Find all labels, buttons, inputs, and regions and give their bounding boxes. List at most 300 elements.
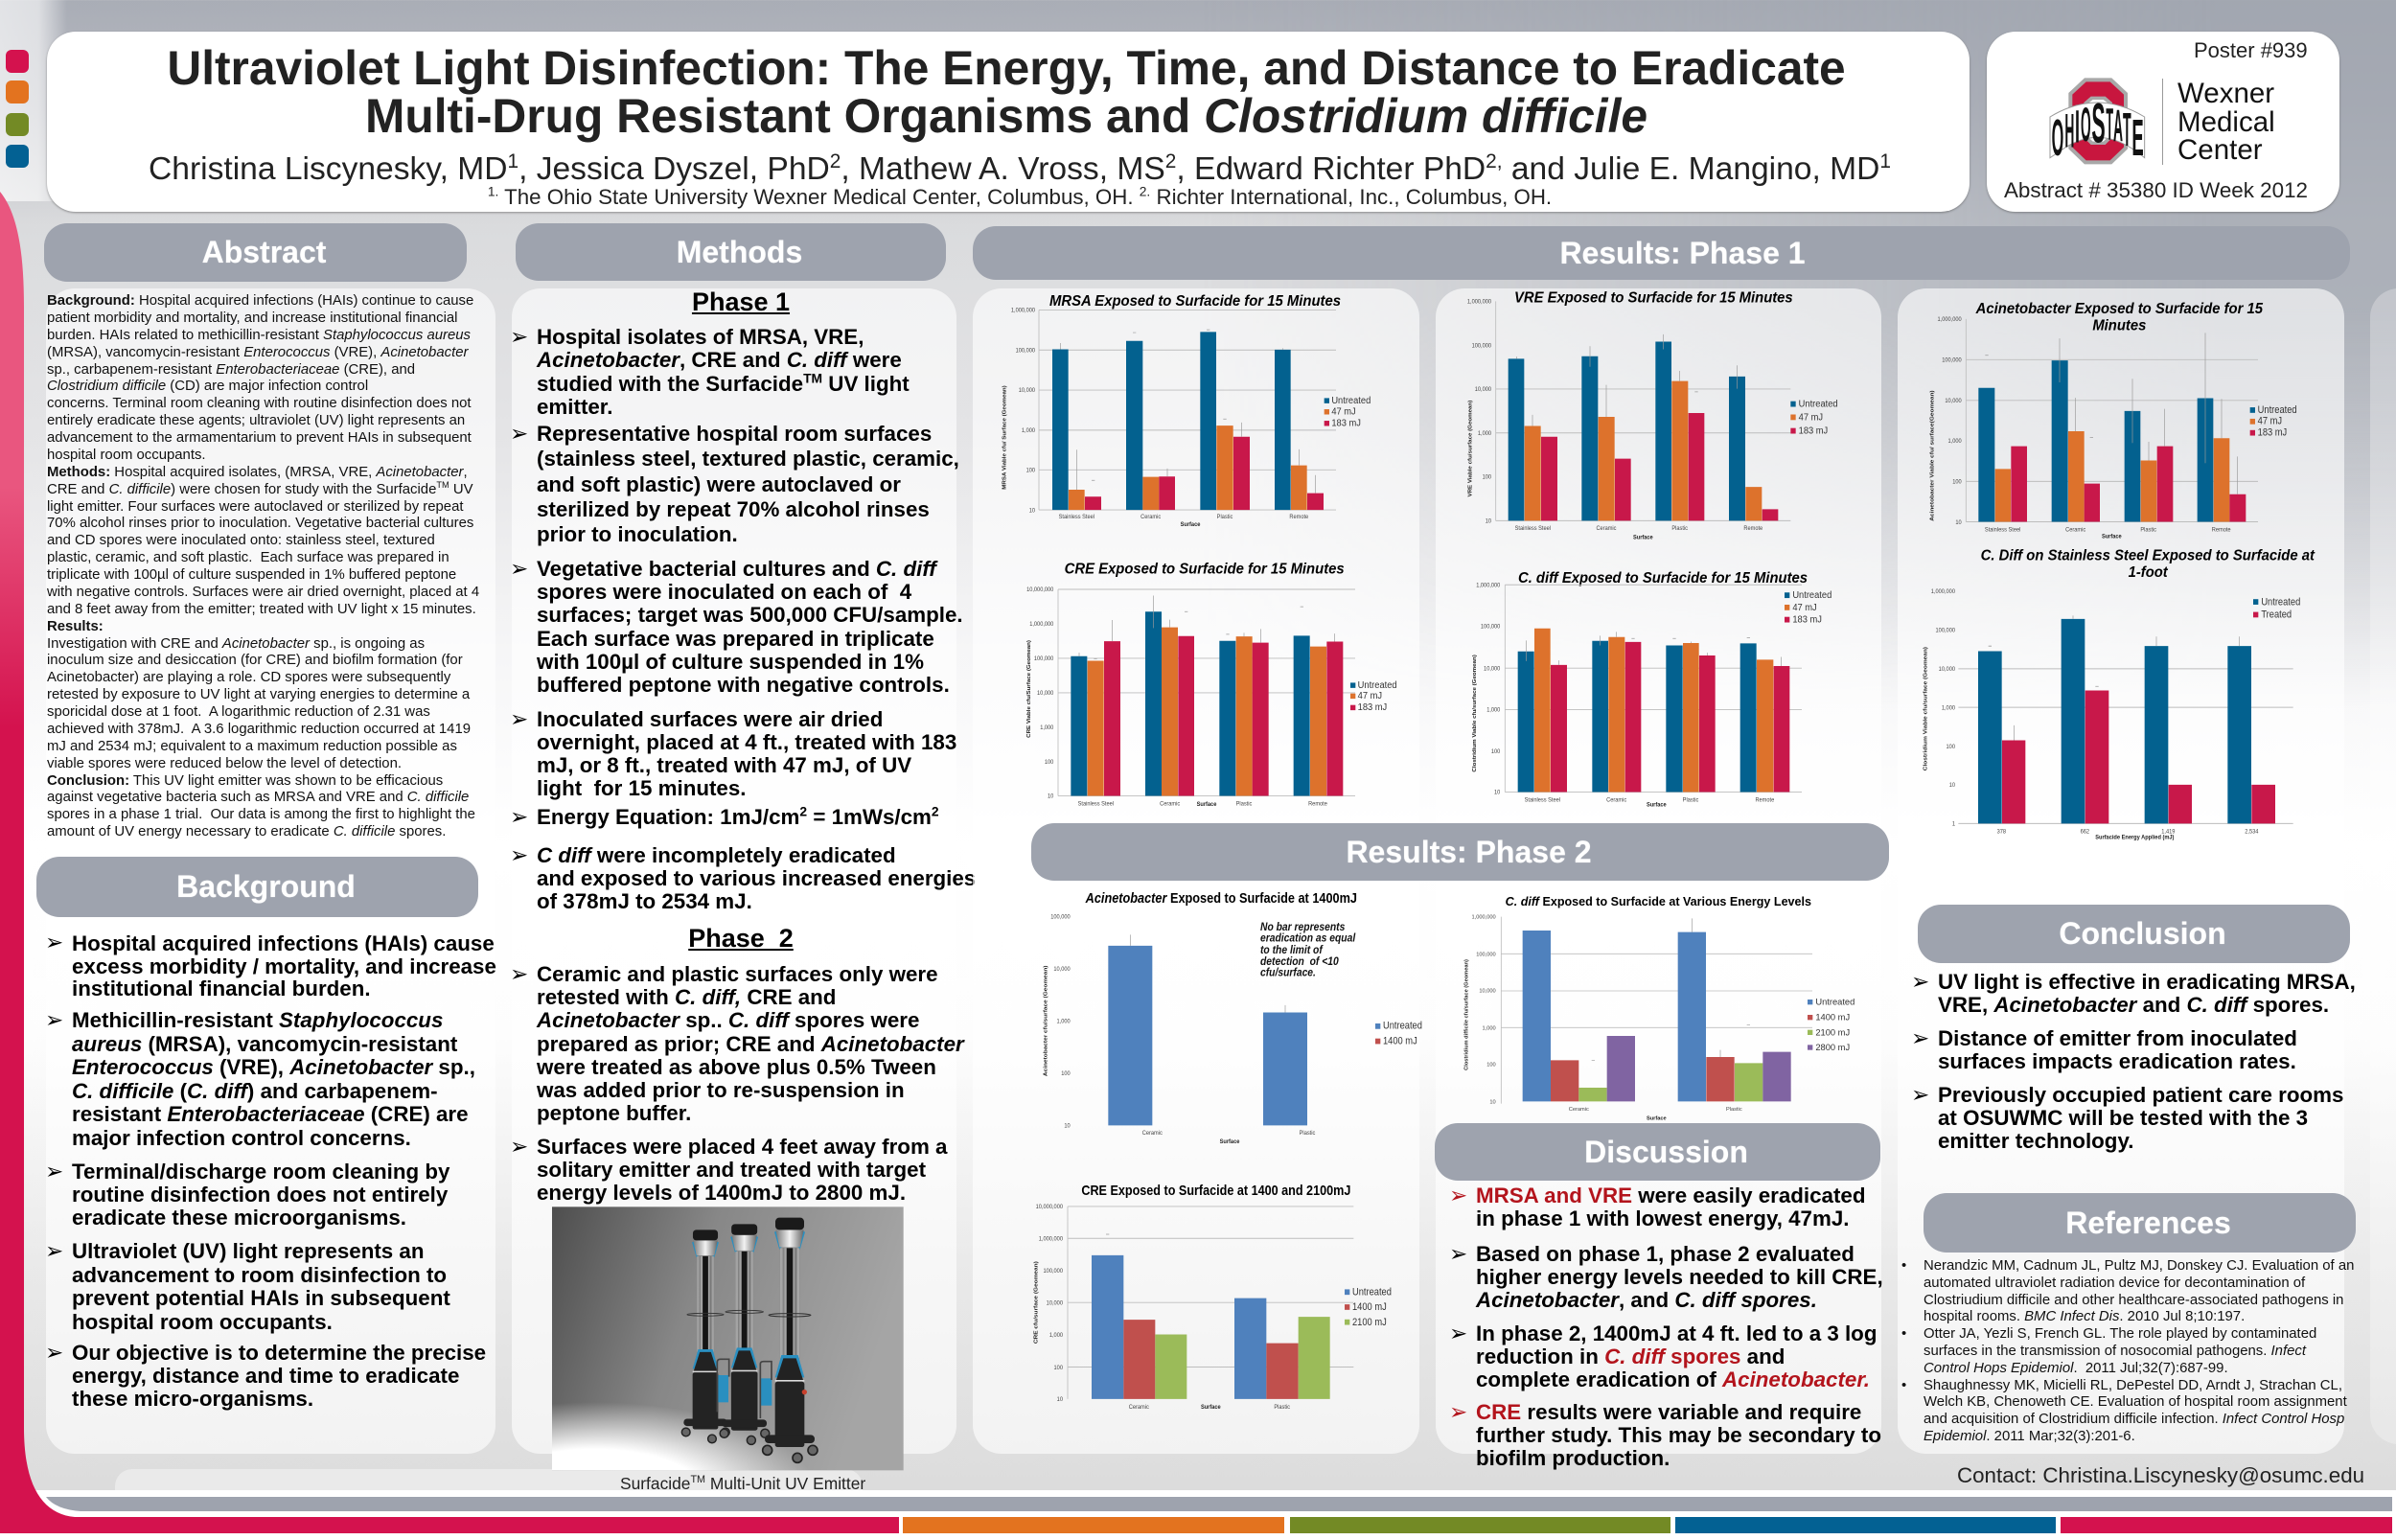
- title panel: [47, 32, 1970, 212]
- chart: C. Diff on stainless steel: 1,000,000: [1931, 588, 1956, 595]
- chart: C. diff: 100,000: [1481, 625, 1501, 631]
- chart: C. diff various energy levels: 1400 mJ: [1815, 1013, 1850, 1023]
- chart: CRE 1400 and 2100mJ: 100,000: [1044, 1268, 1064, 1275]
- chart: CRE 1400 and 2100mJ: 100: [1054, 1364, 1064, 1371]
- chart: CRE 1400 and 2100mJ: Untreated: [1352, 1287, 1392, 1299]
- chart: CRE: 1,000: [1040, 725, 1054, 731]
- background bullet 3: [45, 1160, 450, 1230]
- chart: C. Diff on stainless steel: [1923, 547, 2315, 841]
- methods bullet 4: overnight, placed at 4 ft., treated with 183: [537, 730, 956, 754]
- references text: Welch KB, Chenoweth CE. Evaluation of hospital room assignment: [1924, 1394, 2347, 1410]
- panel: results 1: [973, 288, 1419, 1454]
- background bullet 5: energy, distance and time to eradicate: [72, 1364, 459, 1388]
- methods bullet 6: [510, 843, 976, 913]
- chart: C. diff: Plastic: [1683, 798, 1698, 804]
- discussion bullet 3: complete eradication of Acinetobacter.: [1476, 1368, 1870, 1391]
- chart: Acinetobacter: Surface: [2102, 533, 2122, 540]
- abstract text: Background: Hospital acquired infections (HAIs) continue to cause: [47, 293, 473, 309]
- chart: CRE: 100: [1045, 760, 1054, 766]
- heading: Results Phase 1: [973, 226, 2350, 280]
- methods bullet 1: studied with the SurfacideTM UV light: [537, 370, 910, 396]
- methods bullet 3: surfaces; target was 500,000 CFU/sample.: [537, 603, 963, 627]
- methods bullet 4: mJ, or 8 ft., treated with 47 mJ, of UV: [537, 753, 911, 777]
- chart: C. diff various energy levels: Clostridium difficile cfu/surface (Geomean): [1464, 959, 1470, 1070]
- discussion text: ➢: [1449, 1184, 1467, 1208]
- references text: hospital rooms. BMC Infect Dis. 2010 Jul 8;10:197.: [1924, 1309, 2245, 1324]
- methods bullet 7: [510, 962, 965, 1125]
- chart: C. diff: 1,000: [1486, 707, 1501, 714]
- abstract text: Investigation with CRE and Acinetobacter sp., is ongoing as: [47, 636, 425, 652]
- conclusion bullet 1: UV light is effective in eradicating MRSA,: [1938, 970, 2356, 994]
- conclusion text: ➢: [1911, 1026, 1929, 1051]
- chart: CRE: 10,000,000: [1026, 587, 1054, 593]
- panel: bottom stub: [115, 1469, 863, 1490]
- abstract text: Clostridium difficile (CD) are major infection control: [47, 379, 368, 394]
- abstract text: CRE and C. difficile) were chosen for study with the SurfacideTM UV: [47, 480, 473, 497]
- background bullet 2: Methicillin-resistant Staphylococcus: [72, 1008, 443, 1032]
- chart: C. diff: 47 mJ: [1792, 602, 1817, 613]
- heading: Discussion: Discussion: [1584, 1135, 1748, 1169]
- background bullet 1: excess morbidity / mortality, and increase: [72, 954, 496, 978]
- discussion bullet 2: [1449, 1242, 1883, 1312]
- chart: Acinetobacter: Untreated: [2258, 404, 2297, 416]
- chart: C. diff: 10: [1494, 791, 1501, 796]
- abstract text: Methods: Hospital acquired isolates, (MRSA, VRE, Acinetobacter,: [47, 465, 468, 480]
- panel: methods: ➢: [510, 707, 528, 732]
- chart: CRE 1400 and 2100mJ: 1,000: [1049, 1332, 1064, 1339]
- chart: Acinetobacter: 1,000,000: [1937, 316, 1962, 323]
- chart: VRE: 47 mJ: [1799, 412, 1823, 423]
- abstract text: and CD spores were inoculated onto: stainless steel, textured: [47, 533, 435, 548]
- chart: Acinetobacter 1400mJ: Ceramic: [1142, 1130, 1163, 1137]
- chart: C. diff: Untreated: [1792, 590, 1832, 601]
- methods bullet 7: Ceramic and plastic surfaces only were: [537, 962, 938, 986]
- panel: results 2: [1436, 288, 1881, 1454]
- conclusion bullet 3: Previously occupied patient care rooms: [1938, 1083, 2343, 1107]
- chart: Acinetobacter 1400mJ: Plastic: [1300, 1130, 1315, 1137]
- charts column 3: Acinetobacter and C. Diff on stainless steel: [1923, 300, 2315, 841]
- logo: Ohio State block O: O: [2052, 110, 2063, 168]
- background shading right: [1364, 0, 2396, 667]
- logo: Ohio State block O: A: [2113, 102, 2123, 151]
- note: to the limit of: [1260, 944, 1324, 956]
- references text: •: [1901, 1378, 1906, 1393]
- affiliations: 1. The Ohio State University Wexner Medical Center, Columbus, OH. 2. Richter International, Inc., Columbus, OH.: [488, 184, 1552, 209]
- chart: CRE 1400 and 2100mJ: Ceramic: [1129, 1404, 1149, 1411]
- methods bullet 6: of 378mJ to 2534 mJ.: [537, 889, 752, 913]
- chart: CRE 1400 and 2100mJ: 10,000,000: [1036, 1204, 1064, 1210]
- chart: Acinetobacter 1400mJ: 1,000: [1057, 1018, 1071, 1025]
- chart: C. diff: Remote: [1755, 798, 1775, 804]
- heading: References: [1924, 1193, 2356, 1253]
- chart: C. Diff on stainless steel: Clostridium Viable cfu/surface (Geomean): [1923, 647, 1928, 770]
- methods bullet 7: were treated as above plus 0.5% Tween: [537, 1055, 936, 1079]
- conclusion bullet 1: [1911, 970, 2356, 1017]
- wordmark: Wexner: [2177, 78, 2274, 109]
- panel: methods: ➢: [510, 843, 528, 868]
- methods bullet 3: buffered peptone with negative controls.: [537, 673, 950, 697]
- abstract text: with negative controls. Surfaces were air dried overnight, placed at 4: [47, 585, 479, 600]
- note: cfu/surface.: [1260, 967, 1316, 979]
- chart: Acinetobacter 1400mJ: Untreated: [1383, 1021, 1422, 1032]
- chart: Acinetobacter 1400mJ: [1043, 890, 1422, 1145]
- references text: Control Hops Epidemiol. 2011 Jul;32(7):687-99.: [1924, 1361, 2228, 1376]
- conclusion text: [1911, 970, 2356, 1153]
- conclusion bullet 1: VRE, Acinetobacter and C. diff spores.: [1938, 993, 2329, 1017]
- chart: MRSA: MRSA Exposed to Surfacide for 15 Minutes: [1049, 294, 1341, 310]
- chart: CRE 1400 and 2100mJ: 10,000: [1047, 1299, 1064, 1307]
- background bullet 5: these micro-organisms.: [72, 1387, 313, 1411]
- chart: CRE: Ceramic: [1160, 802, 1180, 808]
- abstract text: patient morbidity and mortality, and increase institutional financial: [47, 310, 457, 326]
- chart: CRE: Surface: [1197, 802, 1217, 808]
- chart: VRE: 1,000: [1478, 431, 1492, 437]
- chart: C. Diff on stainless steel: 1-foot: [2129, 563, 2169, 581]
- abstract text: mJ and 2534 mJ; equivalent to a maximum reduction possible as: [47, 739, 457, 754]
- chart: Acinetobacter: Acinetobacter Exposed to Surfacide for 15: [1975, 300, 2264, 317]
- chart: C. Diff on stainless steel: 1: [1952, 820, 1956, 828]
- methods bullet 7: retested with C. diff, CRE and: [537, 985, 836, 1009]
- panel: abstract and background: ➢: [45, 931, 63, 955]
- chart: VRE: 10: [1486, 518, 1492, 525]
- panel: methods: ➢: [510, 325, 528, 350]
- abstract text: retested by exposure to UV light at varying energies to determine a: [47, 687, 470, 702]
- discussion bullet 3: reduction in C. diff spores and: [1476, 1345, 1785, 1368]
- chart: C. diff: Surface: [1647, 802, 1667, 809]
- chart: MRSA: MRSA Viable cfu/ Surface (Geomean): [1002, 385, 1007, 490]
- heading: Results Phase 1: Results: Phase 1: [1559, 236, 1806, 270]
- logo: Ohio State block O: S: [2091, 92, 2106, 154]
- chart: CRE 1400 and 2100mJ: 1,000,000: [1039, 1235, 1064, 1243]
- abstract text: light emitter. Four surfaces were autoclaved or sterilized by repeat: [47, 498, 464, 514]
- chart: MRSA: 1,000,000: [1011, 308, 1036, 314]
- background bullet 2: Enterococcus (VRE), Acinetobacter sp.,: [72, 1055, 475, 1079]
- chart: MRSA: Remote: [1289, 515, 1309, 520]
- background bullet 3: eradicate these microorganisms.: [72, 1206, 406, 1230]
- note: No bar represents: [1260, 921, 1345, 933]
- methods bullet 4: Inoculated surfaces were air dried: [537, 707, 883, 731]
- chart: VRE: Stainless Steel: [1515, 526, 1551, 532]
- charts phase 2 left: Acinetobacter and CRE: [1033, 890, 1422, 1411]
- conclusion bullet 3: [1911, 1083, 2343, 1153]
- chart: VRE: 100,000: [1472, 343, 1492, 349]
- chart: CRE: CRE Exposed to Surfacide for 15 Minutes: [1065, 562, 1345, 577]
- chart: C. diff various energy levels: C. diff Exposed to Surfacide at Various Energy Levels: [1506, 895, 1811, 908]
- discussion bullet 2: higher energy levels needed to kill CRE,: [1476, 1265, 1883, 1289]
- methods bullet 4: [510, 707, 956, 800]
- abstract text: plastic, ceramic, and soft plastic. Each surface was prepared in: [47, 550, 449, 565]
- discussion bullet 1: in phase 1 with lowest energy, 47mJ.: [1476, 1207, 1850, 1230]
- chart: CRE 1400 and 2100mJ: 10: [1057, 1396, 1064, 1403]
- abstract text: against vegetative bacteria such as MRSA and VRE and C. difficile: [47, 790, 469, 805]
- chart: VRE: 183 mJ: [1799, 425, 1828, 437]
- caption: SurfacideTM Multi-Unit UV Emitter: [620, 1474, 865, 1493]
- chart: VRE: [1467, 290, 1838, 541]
- chart: C. Diff on stainless steel: Treated: [2261, 609, 2292, 621]
- panel: methods: ➢: [510, 557, 528, 582]
- heading: Abstract: [44, 223, 467, 282]
- chart: C. Diff on stainless steel: 10,000: [1939, 666, 1956, 673]
- chart: C. diff: Clostridium Viable cfu/surface (Geomean): [1472, 655, 1478, 772]
- chart: CRE 1400 and 2100mJ: CRE cfu/surface (Geomean): [1033, 1261, 1039, 1344]
- methods bullet 3: with 100µl of culture suspended in 1%: [537, 650, 924, 674]
- chart: C. diff various energy levels: Untreated: [1815, 998, 1855, 1007]
- background bullet 2: C. difficile (C. diff) and carbapenem-: [72, 1079, 438, 1102]
- panel: methods: ➢: [510, 422, 528, 447]
- chart: C. diff: 183 mJ: [1792, 614, 1822, 626]
- discussion text: ➢: [1449, 1322, 1467, 1346]
- chart: VRE: 100: [1483, 475, 1492, 481]
- heading: Abstract: Abstract: [202, 235, 326, 269]
- logo: Ohio State block O: O: [2081, 97, 2091, 151]
- chart: VRE: Untreated: [1799, 399, 1838, 410]
- discussion bullet 4: CRE results were variable and require: [1476, 1400, 1861, 1424]
- chart: CRE 1400 and 2100mJ: [1033, 1183, 1392, 1411]
- methods bullet 3: Vegetative bacterial cultures and C. diff: [537, 557, 936, 581]
- chart: C. Diff on stainless steel: Surfacide Energy Applied (mJ): [2095, 834, 2174, 841]
- abstract text: and 8 feet away from the emitter; treated with UV light x 15 minutes.: [47, 602, 476, 617]
- heading: Background: Background: [176, 869, 356, 904]
- chart: MRSA: 10,000: [1019, 388, 1036, 394]
- heading: Conclusion: [1918, 905, 2350, 963]
- chart: C. diff various energy levels: 1,000: [1483, 1025, 1496, 1031]
- chart: Acinetobacter 1400mJ: Acinetobacter cfu/surface (Geomean): [1043, 966, 1048, 1076]
- chart: C. diff: Stainless Steel: [1525, 798, 1560, 804]
- background bullet 5: Our objective is to determine the precise: [72, 1341, 486, 1365]
- chart: CRE: Untreated: [1358, 680, 1397, 691]
- background bullet 5: [45, 1341, 486, 1411]
- background bullet 3: routine disinfection does not entirely: [72, 1183, 448, 1207]
- discussion bullet 4: biofilm production.: [1476, 1446, 1670, 1470]
- chart: CRE 1400 and 2100mJ: Plastic: [1274, 1404, 1290, 1411]
- chart: Acinetobacter 1400mJ: Acinetobacter Exposed to Surfacide at 1400mJ: [1085, 890, 1357, 906]
- logo: Ohio State block O: [2049, 78, 2145, 168]
- panel: abstract and background: ➢: [45, 1239, 63, 1264]
- chart: MRSA: 1,000: [1022, 428, 1036, 434]
- conclusion text: ➢: [1911, 970, 1929, 995]
- references text: surfaces in the transmission of nosocomial pathogens. Infect: [1924, 1344, 2306, 1359]
- chart: Acinetobacter: Ceramic: [2065, 526, 2085, 534]
- chart: CRE: Stainless Steel: [1078, 802, 1114, 808]
- heading: phase 1: Phase 1: [692, 287, 790, 316]
- panel: abstract and background: ➢: [45, 1341, 63, 1366]
- heading: Discussion: [1435, 1123, 1880, 1181]
- methods bullet 7: peptone buffer.: [537, 1101, 691, 1125]
- chart: CRE: Remote: [1308, 802, 1328, 808]
- chart: CRE: 10,000: [1037, 691, 1054, 697]
- abstract text: entirely eradicate these agents; ultraviolet (UV) light represents an: [47, 413, 465, 428]
- chart: Acinetobacter: 10,000: [1945, 398, 1962, 404]
- chart: CRE: 10: [1048, 794, 1054, 800]
- conclusion bullet 3: emitter technology.: [1938, 1129, 2133, 1153]
- chart: C. diff various energy levels: 10,000: [1479, 989, 1496, 995]
- abstract text: Results:: [47, 619, 104, 634]
- discussion bullet 2: Based on phase 1, phase 2 evaluated: [1476, 1242, 1855, 1266]
- heading: Methods: [516, 223, 946, 281]
- wordmark: [2177, 78, 2275, 166]
- chart: Acinetobacter: 1,000: [1948, 438, 1962, 445]
- chart: C. diff: [1472, 571, 1832, 809]
- discussion bullet 1: [1449, 1184, 1865, 1230]
- title: [167, 41, 1846, 143]
- chart: Acinetobacter: 10: [1955, 518, 1962, 526]
- methods bullet 2: Representative hospital room surfaces: [537, 422, 932, 446]
- methods bullet 3: [510, 557, 963, 697]
- chart: CRE: 47 mJ: [1358, 691, 1382, 701]
- chart: Acinetobacter: 183 mJ: [2258, 427, 2287, 439]
- chart: CRE: 100,000: [1034, 656, 1054, 662]
- references text: Nerandzic MM, Cadnum JL, Pultz MJ, Donskey CJ. Evaluation of an: [1924, 1258, 2354, 1274]
- chart: C. diff various energy levels: [1464, 895, 1855, 1122]
- abstract text: amount of UV energy necessary to eradicate C. difficile spores.: [47, 824, 446, 839]
- chart: C. Diff on stainless steel: 1,000: [1942, 704, 1956, 712]
- chart: VRE: VRE Viable cfu/surface (Geomean): [1468, 401, 1474, 497]
- chart: Acinetobacter: 100: [1952, 478, 1962, 486]
- panel: abstract and background: ➢: [45, 1008, 63, 1033]
- chart: VRE: Ceramic: [1596, 526, 1617, 532]
- methods bullet 2: sterilized by repeat 70% alcohol rinses: [537, 497, 930, 521]
- chart: MRSA: 100,000: [1016, 348, 1036, 355]
- chart: C. diff various energy levels: Plastic: [1726, 1107, 1742, 1113]
- background bullet 4: Ultraviolet (UV) light represents an: [72, 1239, 425, 1263]
- background bullet 1: [45, 931, 496, 1000]
- background bullet 3: Terminal/discharge room cleaning by: [72, 1160, 449, 1184]
- chart: VRE: Surface: [1633, 535, 1653, 541]
- chart: MRSA: Plastic: [1217, 515, 1233, 520]
- wordmark: Center: [2177, 134, 2263, 166]
- methods bullet 1: Acinetobacter, CRE and C. diff were: [537, 348, 902, 372]
- photo: Surfacide emitter: [552, 1207, 904, 1470]
- chart: Acinetobacter 1400mJ: 100,000: [1050, 913, 1071, 921]
- methods bullet 6: C diff were incompletely eradicated: [537, 843, 896, 867]
- chart: C. diff: C. diff Exposed to Surfacide for 15 Minutes: [1518, 571, 1808, 586]
- methods bullet 8: Surfaces were placed 4 feet away from a: [537, 1135, 947, 1159]
- note: eradication as equal: [1260, 932, 1356, 945]
- abstract text: advancement to the armamentarium to prevent HAIs in subsequent: [47, 430, 472, 446]
- discussion bullet 1: MRSA and VRE were easily eradicated: [1476, 1184, 1865, 1207]
- authors: Christina Liscynesky, MD1, Jessica Dyszel, PhD2, Mathew A. Vross, MS2, Edward Richter PhD2, and Julie E. Mangino, MD1: [149, 150, 1891, 187]
- chart: CRE: Plastic: [1236, 802, 1252, 808]
- abstract text: Conclusion: This UV light emitter was shown to be efficacious: [47, 772, 443, 788]
- methods bullet 7: prepared as prior; CRE and Acinetobacter: [537, 1032, 964, 1056]
- chart: CRE 1400 and 2100mJ: CRE Exposed to Surfacide at 1400 and 2100mJ: [1081, 1183, 1350, 1198]
- panel: methods: [512, 288, 956, 1454]
- chart: C. Diff on stainless steel: 100: [1947, 744, 1956, 750]
- chart: C. Diff on stainless steel: 10: [1949, 782, 1956, 789]
- chart: Acinetobacter 1400mJ: 10,000: [1053, 966, 1071, 973]
- chart: MRSA: 47 mJ: [1331, 406, 1356, 418]
- chart: C. diff various energy levels: 2100 mJ: [1815, 1027, 1850, 1037]
- chart: C. Diff on stainless steel: C. Diff on Stainless Steel Exposed to Surfacide at: [1981, 547, 2315, 564]
- chart: MRSA: Ceramic: [1140, 515, 1161, 520]
- references text: and acquisition of Clostridium difficile infection. Infect Control Hosp: [1924, 1412, 2344, 1427]
- heading: References: References: [2065, 1206, 2231, 1240]
- wordmark: Medical: [2177, 105, 2275, 138]
- methods bullet 2: [510, 422, 959, 546]
- methods bullet 8: solitary emitter and treated with target: [537, 1158, 926, 1182]
- methods bullet 3: spores were inoculated on each of 4: [537, 580, 911, 604]
- references text: [1901, 1258, 2354, 1444]
- methods bullet 8: energy levels of 1400mJ to 2800 mJ.: [537, 1181, 906, 1205]
- chart: CRE 1400 and 2100mJ: 1400 mJ: [1352, 1302, 1387, 1313]
- heading: Results Phase 2: [1031, 823, 1889, 881]
- chart: Acinetobacter: Stainless Steel: [1985, 526, 2020, 534]
- heading: Background: [36, 857, 478, 917]
- chart: C. diff: 100: [1491, 749, 1501, 755]
- chart: MRSA: Untreated: [1331, 396, 1371, 406]
- methods bullet 7: Acinetobacter sp.. C. diff spores were: [537, 1008, 919, 1032]
- abstract text: achieved with 378mJ. A 3.6 logarithmic reduction occurred at 1419: [47, 722, 471, 737]
- chart: Acinetobacter 1400mJ: 100: [1061, 1070, 1071, 1077]
- methods bullet 6: and exposed to various increased energies: [537, 866, 976, 890]
- chart: Acinetobacter: Acinetobacter Viable cfu/ surface(Geomean): [1929, 390, 1935, 521]
- discussion text: [1449, 1184, 1883, 1470]
- chart: C. diff various energy levels: 2800 mJ: [1815, 1043, 1850, 1052]
- chart: C. Diff on stainless steel: Untreated: [2261, 597, 2300, 609]
- chart: CRE 1400 and 2100mJ: Surface: [1201, 1404, 1221, 1411]
- abstract text: concerns. Terminal room cleaning with routine disinfection does not: [47, 396, 472, 411]
- chart: Acinetobacter 1400mJ: Surface: [1220, 1138, 1240, 1145]
- note: detection of <10: [1260, 955, 1339, 968]
- chart: C. Diff on stainless steel: 378: [1997, 828, 2007, 835]
- divider: [2162, 79, 2163, 165]
- chart: Acinetobacter 1400mJ: 10: [1064, 1122, 1071, 1130]
- logo: Ohio State block O: T: [2123, 104, 2131, 156]
- discussion bullet 4: further study. This may be secondary to: [1476, 1423, 1881, 1447]
- heading: Results Phase 2: Results: Phase 2: [1346, 834, 1592, 868]
- abstract text: hospital room occupants.: [47, 448, 206, 463]
- conclusion text: ➢: [1911, 1083, 1929, 1108]
- chart: C. diff: Ceramic: [1606, 798, 1626, 804]
- charts column 1: MRSA and CRE: [1002, 294, 1397, 808]
- logo: Ohio State block O: E: [2131, 110, 2144, 168]
- panel: abstract and background: ➢: [45, 1160, 63, 1184]
- chart: CRE: CRE Viable cfu/Surface (Geomean): [1026, 640, 1032, 738]
- abstract text: burden. HAIs related to methicillin-resistant Staphylococcus aureus: [47, 328, 471, 343]
- abstract text: sp., carbapenem-resistant Enterobacteriaceae (CRE), and: [47, 362, 415, 378]
- chart: Acinetobacter: Remote: [2212, 526, 2231, 534]
- background bullet 1: Hospital acquired infections (HAIs) cause: [72, 931, 495, 955]
- discussion bullet 3: In phase 2, 1400mJ at 4 ft. led to a 3 log: [1476, 1322, 1877, 1345]
- methods bullet 2: prior to inoculation.: [537, 522, 738, 546]
- chart: MRSA: 183 mJ: [1331, 418, 1361, 429]
- abstract text: sporicidal dose at 1 foot. A logarithmic reduction of 2.31 was: [47, 704, 430, 720]
- conclusion bullet 2: surfaces impacts eradication rates.: [1938, 1049, 2296, 1073]
- methods bullet 1: Hospital isolates of MRSA, VRE,: [537, 325, 864, 349]
- chart: C. diff various energy levels: 10: [1489, 1099, 1496, 1105]
- chart: VRE: 1,000,000: [1467, 299, 1492, 306]
- discussion bullet 3: [1449, 1322, 1877, 1391]
- chart: C. Diff on stainless steel: 1,419: [2161, 828, 2176, 835]
- note: [1260, 921, 1356, 979]
- charts column 2: VRE and C. diff: [1467, 290, 1838, 809]
- background bullet 2: [45, 1008, 475, 1150]
- abstract text: triplicate with 100µl of culture suspended in 1% buffered peptone: [47, 567, 456, 583]
- title: Multi-Drug Resistant Organisms and Clostridium difficile: [365, 89, 1647, 143]
- title: Ultraviolet Light Disinfection: The Energy, Time, and Distance to Eradicate: [167, 41, 1846, 95]
- discussion text: ➢: [1449, 1242, 1467, 1267]
- chart: CRE 1400 and 2100mJ: 2100 mJ: [1352, 1317, 1387, 1328]
- methods bullet 7: was added prior to re-suspension in: [537, 1078, 905, 1102]
- chart: VRE: Remote: [1743, 526, 1763, 532]
- chart: Acinetobacter 1400mJ: 1400 mJ: [1383, 1036, 1417, 1047]
- conclusion bullet 2: [1911, 1026, 2297, 1073]
- discussion text: ➢: [1449, 1400, 1467, 1425]
- background bullet 2: resistant Enterobacteriaceae (CRE) are: [72, 1102, 469, 1126]
- methods bullet 1: [510, 325, 910, 419]
- logo: Ohio State block O: T: [2106, 101, 2113, 150]
- abstract number: Abstract # 35380 ID Week 2012: [2004, 178, 2308, 202]
